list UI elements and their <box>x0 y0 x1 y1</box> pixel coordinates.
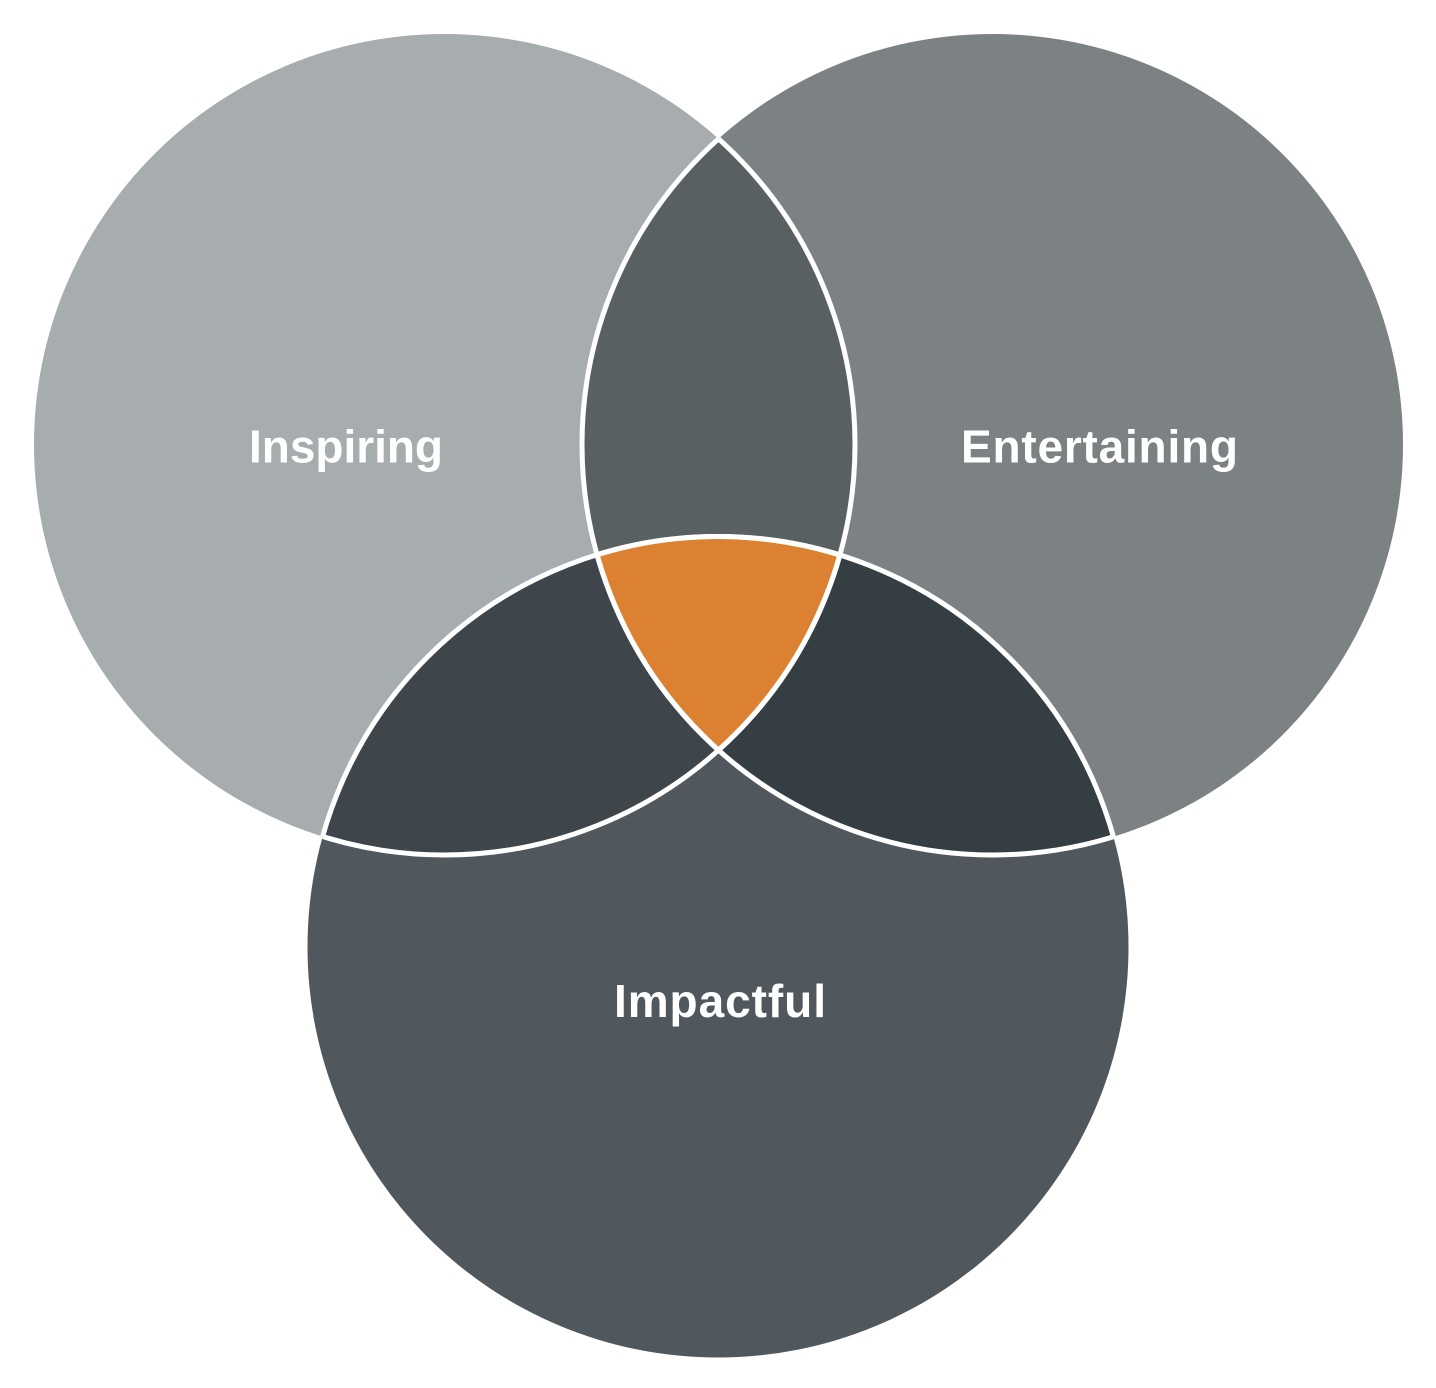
circle: Entertaining <box>582 34 1403 855</box>
circle: Inspiring <box>34 34 855 855</box>
overlap: Inspiring and Impactful <box>326 558 714 852</box>
circle: Impactful <box>308 536 1128 1358</box>
overlap: Entertaining and Impactful <box>722 558 1110 852</box>
label: Impactful: Impactful <box>614 975 826 1027</box>
label: Entertaining: Entertaining <box>961 420 1238 472</box>
white outlines of the overlaps <box>320 137 1116 858</box>
overlap: Inspiring and Entertaining <box>584 142 852 552</box>
label: Inspiring: Inspiring <box>249 420 443 472</box>
overlap: center of all three <box>600 539 837 746</box>
